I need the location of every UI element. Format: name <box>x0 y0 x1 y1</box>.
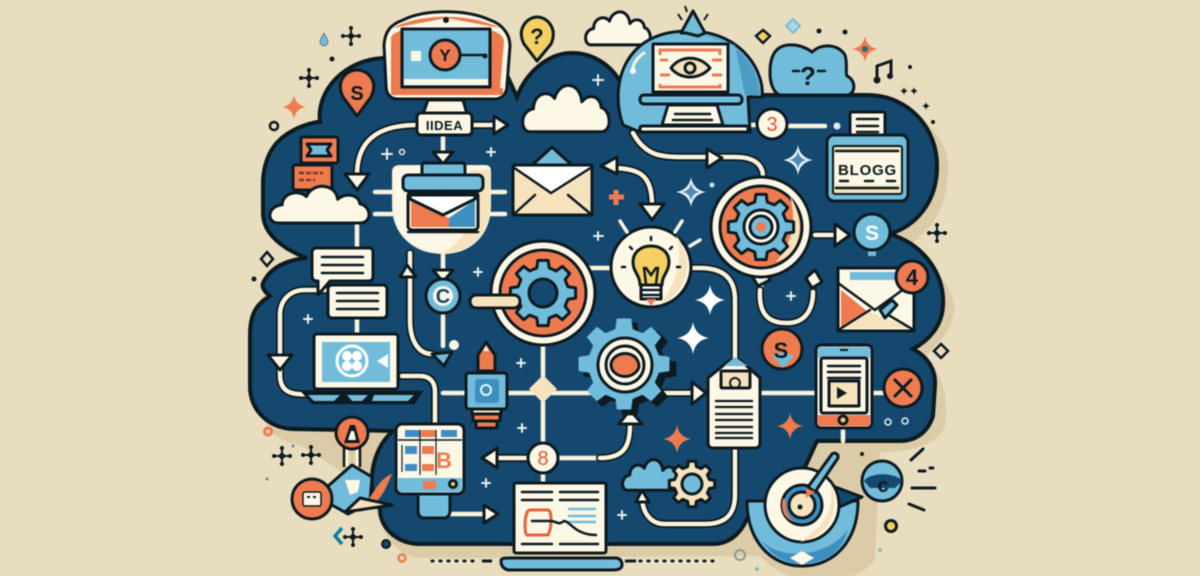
icon: pin question: ? <box>530 24 544 49</box>
icon: light blue gear <box>579 319 676 415</box>
icon: small figure <box>432 340 459 366</box>
icon: laptop <box>303 334 421 403</box>
icon: pin S: S <box>350 83 364 105</box>
icon: large cloud <box>523 85 609 132</box>
icon: top cloud <box>586 12 650 45</box>
icon: central orange gear <box>491 241 595 345</box>
icon: speech bubble 1 <box>312 248 373 295</box>
icon: X badge <box>884 369 922 407</box>
icon: teal phone badge <box>862 461 902 501</box>
icon: pencil chip <box>466 342 507 428</box>
icon: question cloud: ? <box>800 61 816 91</box>
icon: cloud with gear <box>623 460 715 507</box>
icon: number 8 badge: 8 <box>537 448 549 470</box>
icon: orange S badge <box>762 329 802 369</box>
icon: dome with eye monitor <box>618 6 762 132</box>
icon: question cloud <box>770 45 854 95</box>
icon: right envelope: 4 <box>906 265 919 290</box>
icon: right envelope <box>838 261 928 331</box>
icon: left cloud <box>270 186 369 223</box>
icon: document <box>708 357 760 448</box>
icon: number 8 badge <box>528 443 558 473</box>
icon: speech bubble 2 <box>328 285 387 318</box>
icon: top monitor <box>384 12 510 114</box>
sparkles and plus marks on the panel <box>304 75 908 519</box>
icon: orange S badge: S <box>774 338 788 363</box>
decorative icons around the panel <box>252 19 948 571</box>
label: IDEA <box>417 113 472 135</box>
icon: pin S <box>340 70 374 116</box>
icon: number 3 badge: 3 <box>766 114 778 136</box>
icon: blog card: BLOGG <box>838 162 897 179</box>
connector lines and arrows <box>280 125 885 524</box>
icon: mail application <box>393 163 490 253</box>
label: IDEA: IIDEA <box>426 118 463 133</box>
icon: gear handle <box>470 295 520 308</box>
icon: C badge <box>426 279 460 313</box>
icon: teal phone badge: c <box>877 475 889 497</box>
icon: A badge and hex <box>292 417 392 519</box>
icon: lightbulb <box>611 221 700 307</box>
icon: article laptop <box>501 483 622 570</box>
dotted line below laptop <box>432 560 720 562</box>
icon: dollar bulb: S <box>865 222 879 245</box>
icon: upper right gear <box>711 177 811 277</box>
blue cloud background panel <box>250 53 943 544</box>
icon: pin question <box>521 17 553 61</box>
icon: data table device <box>396 424 464 518</box>
icon: dollar bulb <box>854 214 890 256</box>
arrowheads <box>268 116 850 523</box>
icon: blog card <box>827 112 908 201</box>
icon: top monitor: Y <box>439 46 451 65</box>
icon: data table device: B <box>436 448 452 473</box>
icon: number 3 badge <box>757 109 787 139</box>
icon: target disc with pencil <box>747 453 862 566</box>
icon: junction diamond <box>529 375 557 403</box>
icon: stickers <box>293 137 338 190</box>
cloud drop shadow <box>260 69 954 576</box>
icon: tablet <box>816 345 872 428</box>
icon: C badge: C <box>436 286 450 308</box>
icon: envelope <box>513 147 592 215</box>
